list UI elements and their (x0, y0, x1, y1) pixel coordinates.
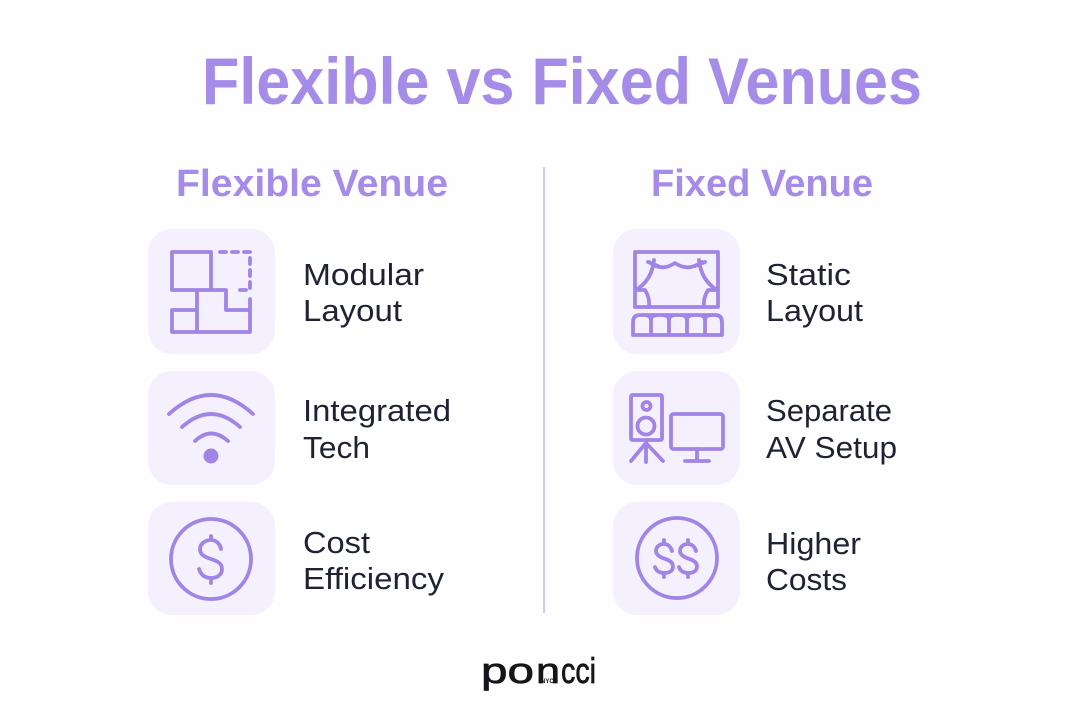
label: Modular (303, 257, 424, 292)
icon: stage and seats (613, 229, 740, 354)
item: static layout (613, 229, 863, 354)
logo: po (481, 650, 534, 691)
logo: cci (561, 650, 596, 691)
item: modular layout (148, 229, 424, 354)
icon: wifi (148, 371, 275, 485)
icon: modular floor plan (148, 229, 275, 354)
logo: NYC (541, 679, 554, 685)
item: higher costs (613, 502, 861, 615)
item: integrated tech: Tech (303, 430, 370, 465)
label: Static (766, 257, 851, 292)
label: Cost (303, 525, 370, 560)
label: Higher (766, 526, 861, 561)
heading: flexible venue: Flexible Venue (176, 163, 448, 205)
label: Integrated (303, 393, 451, 428)
item: integrated tech (148, 371, 451, 485)
title: Flexible vs Fixed Venues (202, 44, 922, 118)
logo: n (536, 650, 560, 691)
logo (481, 650, 596, 691)
label: Separate (766, 393, 892, 428)
heading: fixed venue: Fixed Venue (651, 163, 873, 205)
item: cost efficiency (148, 502, 445, 615)
icon: speaker and monitor (613, 371, 740, 485)
item: cost efficiency: Efficiency (303, 561, 445, 596)
item: separate av setup: AV Setup (766, 430, 897, 465)
icon: double dollar coin (613, 502, 740, 615)
item: higher costs: Costs (766, 562, 847, 597)
item: separate av setup (613, 371, 897, 485)
icon: dollar coin (148, 502, 275, 615)
item: static layout: Layout (766, 293, 863, 328)
item: modular layout: Layout (303, 293, 402, 328)
